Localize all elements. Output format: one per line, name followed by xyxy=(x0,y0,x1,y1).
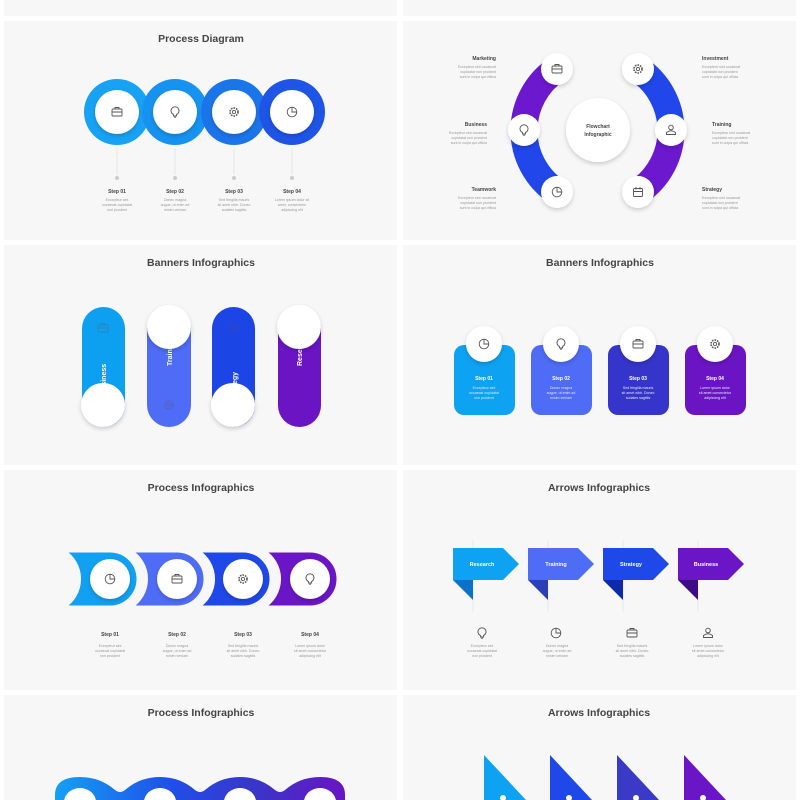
step texts: occaecat cupidatat xyxy=(95,649,125,653)
title: Arrows Infographics xyxy=(548,707,650,719)
step texts: Donec magna xyxy=(166,644,188,648)
step texts: augue, ut enim ad xyxy=(163,649,191,653)
cards: adipiscing elit xyxy=(704,396,726,400)
title: banners infographics: Banners Infographics xyxy=(147,257,255,269)
arrows: Training xyxy=(545,562,567,568)
title: process diagram: Process Diagram xyxy=(158,33,244,45)
icons and texts: augue, ut enim ad xyxy=(543,649,571,653)
step texts: sit amet nibh. Donec xyxy=(227,649,260,653)
side labels: sunt in culpa qui officia xyxy=(460,206,496,210)
step labels: Step 03 xyxy=(225,189,243,195)
icons and texts: Excepteur sint xyxy=(471,644,493,648)
triangles xyxy=(484,755,726,800)
arrows: Business xyxy=(694,562,718,568)
cards: sodales sagittis xyxy=(626,396,650,400)
arrows: Strategy xyxy=(620,562,643,568)
icons and texts: occaecat cupidatat xyxy=(467,649,497,653)
cards: Step 01 xyxy=(475,376,493,382)
pills: Business xyxy=(101,364,108,395)
side labels: sunt in culpa qui officia xyxy=(702,206,738,210)
step labels: sodales sagittis xyxy=(222,208,246,212)
cards: Step 03 xyxy=(629,376,647,382)
center circle xyxy=(566,98,630,162)
title: Arrows Infographics xyxy=(548,482,650,494)
step texts: non proident xyxy=(100,654,120,658)
side labels: Excepteur sint occaecat xyxy=(458,196,496,200)
step labels: adipiscing elit xyxy=(281,208,303,212)
cards: minim veniam xyxy=(550,396,572,400)
panel: arrows infographics (triangles) xyxy=(484,707,726,800)
pills: Research xyxy=(297,334,304,366)
icons and texts: sit amet consectetur xyxy=(692,649,725,653)
icons and texts: non proident xyxy=(472,654,492,658)
cards: Step 04 xyxy=(706,376,724,382)
side labels: cupidatat non proident xyxy=(460,201,496,205)
pills: Training xyxy=(167,339,174,366)
side labels: Excepteur sint occaecat xyxy=(712,131,750,135)
cards xyxy=(454,326,746,415)
panel: process infographics xyxy=(64,482,338,658)
step texts: minim veniam xyxy=(166,654,188,658)
step texts: Step 03 xyxy=(234,632,252,638)
step labels: occaecat cupidatat xyxy=(102,203,132,207)
icons and texts: sit amet nibh. Donec xyxy=(616,649,649,653)
node circles xyxy=(508,53,687,208)
panel: process diagram xyxy=(84,33,325,212)
side labels: cupidatat non proident xyxy=(451,136,487,140)
icons and texts: Donec magna xyxy=(546,644,568,648)
side labels: Training xyxy=(712,122,731,128)
step texts: Step 02 xyxy=(168,632,186,638)
cards: occaecat cupidatat xyxy=(469,391,499,395)
side labels: sunt in culpa qui officia xyxy=(712,141,748,145)
cards: non proident xyxy=(474,396,494,400)
step labels: Lorem ipsum dolor sit xyxy=(275,198,309,202)
step labels: Step 02 xyxy=(166,189,184,195)
cards: Sed fringilla mauris xyxy=(623,386,653,390)
step labels: minim veniam xyxy=(164,208,186,212)
arcs xyxy=(524,69,671,192)
step labels: Step 01 xyxy=(108,189,126,195)
side labels xyxy=(449,56,750,210)
title: Process Infographics xyxy=(148,482,255,494)
cards: augue, ut enim ad xyxy=(547,391,575,395)
wave shape xyxy=(55,777,345,800)
step texts: sit amet consectetur xyxy=(294,649,327,653)
side labels: Excepteur sint occaecat xyxy=(458,65,496,69)
side labels: sunt in culpa qui officia xyxy=(451,141,487,145)
step labels: Step 04 xyxy=(283,189,301,195)
side labels: Strategy xyxy=(702,187,722,193)
title: Banners Infographics xyxy=(546,257,654,269)
segments xyxy=(64,551,338,607)
side labels: Marketing xyxy=(472,56,496,62)
arrows xyxy=(453,540,744,612)
step texts: Step 04 xyxy=(301,632,319,638)
step texts: Step 01 xyxy=(101,632,119,638)
title: Process Infographics xyxy=(148,707,255,719)
icons and texts xyxy=(467,628,725,658)
step labels: Sed fringilla mauris xyxy=(219,198,249,202)
side labels: cupidatat non proident xyxy=(702,70,738,74)
side labels: sunt in culpa qui officia xyxy=(702,75,738,79)
panel: flowchart infographic xyxy=(449,53,750,210)
arrows: Research xyxy=(470,562,495,568)
side labels: Excepteur sint occaecat xyxy=(702,196,740,200)
side labels: Business xyxy=(465,122,487,128)
panel: arrows infographics xyxy=(453,482,744,658)
cards: Donec magna xyxy=(550,386,572,390)
step labels: Excepteur sint xyxy=(106,198,128,202)
step labels xyxy=(102,148,309,212)
step labels: Donec magna xyxy=(164,198,186,202)
icons and texts: Lorem ipsum dolor xyxy=(693,644,724,648)
rings xyxy=(84,79,325,145)
step labels: non proident xyxy=(107,208,127,212)
step texts: Excepteur sint xyxy=(99,644,121,648)
cards: Step 02 xyxy=(552,376,570,382)
panel: vertical banners xyxy=(81,257,321,427)
step texts: Sed fringilla mauris xyxy=(228,644,258,648)
step circles xyxy=(90,559,330,599)
side labels: cupidatat non proident xyxy=(712,136,748,140)
step texts: sodales sagittis xyxy=(231,654,255,658)
center circle: Flowchart xyxy=(586,124,610,130)
side labels: Excepteur sint occaecat xyxy=(449,131,487,135)
icons and texts: Sed fringilla mauris xyxy=(617,644,647,648)
icons and texts: adipiscing elit xyxy=(697,654,719,658)
cards: sit amet consectetur xyxy=(699,391,732,395)
step texts xyxy=(95,632,327,658)
pills xyxy=(81,305,321,427)
side labels: sunt in culpa qui officia xyxy=(460,75,496,79)
side labels: Investment xyxy=(702,56,729,62)
panel: card banners xyxy=(454,257,746,415)
side labels: Teamwork xyxy=(472,187,496,193)
step labels: amet, consectetur xyxy=(278,203,307,207)
side labels: cupidatat non proident xyxy=(702,201,738,205)
cards: sit amet nibh. Donec xyxy=(622,391,655,395)
side labels: cupidatat non proident xyxy=(460,70,496,74)
center circle: Infographic xyxy=(584,132,612,138)
step texts: adipiscing elit xyxy=(299,654,321,658)
cards: Excepteur sint xyxy=(473,386,495,390)
step texts: Lorem ipsum dolor xyxy=(295,644,326,648)
step labels: augue, ut enim ad xyxy=(161,203,189,207)
icons and texts: minim veniam xyxy=(546,654,568,658)
step labels: sit amet nibh. Donec xyxy=(218,203,251,207)
cards: Lorem ipsum dolor xyxy=(700,386,731,390)
panel: process infographics (wave) xyxy=(55,707,345,800)
icons and texts: sodales sagittis xyxy=(620,654,644,658)
side labels: Excepteur sint occaecat xyxy=(702,65,740,69)
pills: Strategy xyxy=(232,372,239,400)
